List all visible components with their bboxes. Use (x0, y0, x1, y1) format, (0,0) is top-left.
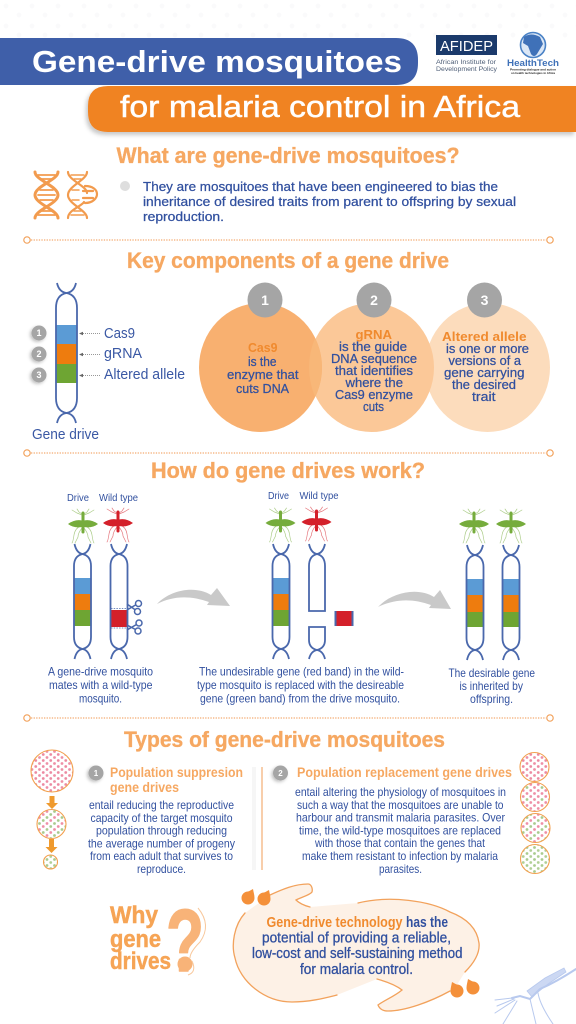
why gene drives: drives (110, 948, 171, 975)
logo: HealthTech: HealthTech (507, 58, 559, 68)
component circles: is the (248, 354, 276, 369)
why gene drives (110, 891, 206, 990)
step 1: mating (48, 493, 153, 706)
panel: population suppression: population through reducing (96, 824, 227, 838)
component circles: gene carrying (444, 365, 524, 380)
panel: population replacement: Population replacement gene drives (297, 765, 512, 780)
heading: how do gene drives work: How do gene drives work? (151, 458, 425, 483)
step 3: inheritance: The desirable gene (448, 666, 535, 680)
logo: HealthTech: on health technologies in Africa (511, 71, 555, 75)
component circles: versions of a (448, 353, 522, 368)
quote bubble: Gene-drive technology (266, 915, 402, 931)
component circles: where the (344, 375, 403, 390)
component circles: Cas9 (248, 340, 278, 355)
panel: population replacement: make them resistant to infection by malaria (302, 849, 498, 863)
panel: population replacement: with those that contain the genes that (314, 836, 486, 850)
why gene drives: ? (166, 891, 204, 990)
logo: AFIDEP: Development Policy (436, 66, 498, 73)
component circles (199, 282, 550, 432)
diagram: gene drive chromosome: Gene drive (32, 426, 99, 443)
panel: population suppression: capacity of the target mosquito (90, 811, 233, 825)
diagram: gene drive chromosome: 3 (36, 370, 42, 380)
step 1: mating: A gene-drive mosquito (48, 665, 153, 679)
component circles: 3 (481, 292, 489, 308)
component circles: cuts DNA (236, 381, 289, 396)
population suppression circles (31, 750, 73, 869)
step 2: replacement: The undesirable gene (red band) in the wild- (199, 665, 404, 679)
quote bubble (233, 884, 480, 1011)
panel: population replacement (273, 765, 512, 876)
step 1: mating: mates with a wild-type (49, 678, 153, 692)
component circles: 1 (261, 292, 269, 308)
intro paragraph: inheritance of desired traits from parent to offspring by sexual (143, 194, 516, 209)
title banner: orange (88, 86, 576, 132)
logo: AFIDEP: AFIDEP (440, 38, 493, 55)
component circles: 2 (370, 292, 378, 308)
panel: population suppression: from each adult that survives to (90, 849, 233, 863)
icon: mosquito outline bottom right (495, 968, 576, 1024)
logo: HealthTech: Promoting dialogue and action (510, 68, 556, 72)
why gene drives: gene (110, 926, 161, 953)
step 3: inheritance: is inherited by (460, 679, 523, 693)
step 1: mating: mosquito. (79, 692, 122, 706)
title banner: orange: for malaria control in Africa (120, 89, 521, 124)
step 3: inheritance: offspring. (470, 692, 513, 706)
step 1: mating: Wild type (99, 493, 138, 504)
arrow: step 2 to step 3 (378, 590, 451, 609)
diagram: gene drive chromosome: 2 (36, 349, 42, 359)
why gene drives: Why (110, 902, 159, 929)
heading: what are gene-drive mosquitoes: What are gene-drive mosquitoes? (116, 143, 460, 168)
component circles: is the guide (339, 339, 407, 354)
step 1: mating: Drive (67, 493, 89, 504)
panel: population suppression: gene drives (110, 780, 179, 795)
logo: AFIDEP (436, 35, 498, 73)
title banner: blue: Gene-drive mosquitoes (32, 44, 402, 79)
quote bubble: potential of providing a reliable, (262, 930, 451, 946)
icon: DNA strands (35, 172, 97, 218)
title banner: blue (0, 38, 418, 85)
population replacement circles (520, 752, 550, 874)
step 2: replacement: type mosquito is replaced with the desireable (197, 678, 404, 692)
intro paragraph (120, 179, 516, 224)
panel: population suppression: entail reducing the reproductive (89, 798, 234, 812)
diagram: gene drive chromosome: Altered allele (104, 366, 185, 383)
intro paragraph: They are mosquitoes that have been engineered to bias the (143, 179, 498, 194)
arrow: step 1 to step 2 (157, 588, 230, 606)
quote bubble: has the (406, 915, 448, 931)
step 2: replacement: Drive (268, 491, 289, 502)
column divider (252, 767, 262, 870)
heading: key components: Key components of a gene drive (127, 248, 449, 273)
step 3: inheritance (448, 509, 535, 706)
component circles: the desired (452, 377, 516, 392)
diagram: gene drive chromosome: gRNA (104, 345, 142, 362)
diagram: gene drive chromosome: 1 (36, 328, 42, 338)
panel: population suppression: the average number of progeny (88, 836, 235, 850)
panel: population replacement: parasites. (379, 862, 422, 876)
component circles: is one or more (446, 341, 529, 356)
diagram: gene drive chromosome (32, 283, 185, 443)
component circles: that identifies (335, 363, 414, 378)
step 2: replacement: Wild type (300, 491, 339, 502)
component circles: cuts (363, 399, 384, 414)
step 2: replacement (197, 491, 404, 706)
panel: population replacement: such a way that the mosquitoes are unable to (297, 798, 504, 812)
panel: population replacement: harbour and transmit malaria parasites. Over (296, 810, 505, 824)
panel: population suppression: Population suppresion (110, 765, 243, 780)
component circles: Cas9 enzyme (335, 387, 413, 402)
logo: AFIDEP: African Institute for (436, 59, 497, 66)
component circles: DNA sequence (331, 351, 417, 366)
panel: population replacement: time, the wild-type mosquitoes are replaced (299, 824, 501, 838)
component circles: enzyme that (227, 367, 299, 382)
panel: population suppression: reproduce. (137, 862, 186, 876)
logo: HealthTech (507, 32, 559, 75)
component circles: gRNA (356, 327, 393, 342)
quote bubble: for malaria control. (300, 962, 413, 978)
intro paragraph: reproduction. (143, 209, 224, 224)
component circles: trait (472, 389, 496, 404)
panel: population replacement: entail altering the physiology of mosquitoes in (295, 785, 506, 799)
step 2: replacement: gene (green band) from the drive mosquito. (200, 692, 400, 706)
heading: types of gene-drive mosquitoes: Types of gene-drive mosquitoes (124, 727, 445, 752)
quote bubble: low-cost and self-sustaining method (252, 946, 462, 962)
panel: population suppression (88, 765, 243, 876)
panel: population replacement: 2 (278, 769, 283, 778)
panel: population suppression: 1 (94, 769, 99, 778)
diagram: gene drive chromosome: Cas9 (104, 325, 135, 342)
component circles: Altered allele (442, 329, 526, 344)
